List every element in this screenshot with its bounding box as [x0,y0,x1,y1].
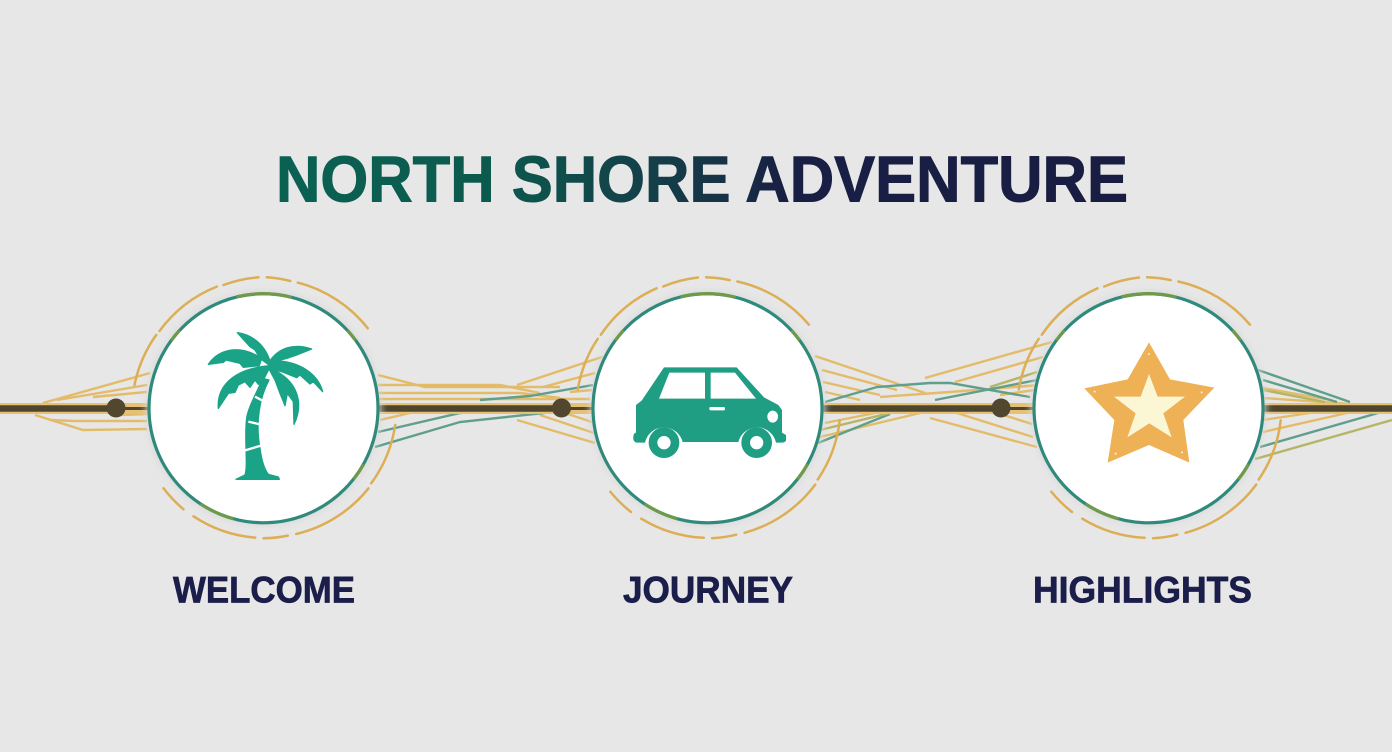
icon: car [633,367,786,454]
panel: journey [574,273,844,610]
label: highlights: HIGHLIGHTS [1033,570,1252,610]
welcome dashed ring [134,277,395,538]
icon: star [1084,342,1214,463]
panel: highlights [1015,273,1285,610]
teal route strands [375,370,1378,447]
label: journey: JOURNEY [623,570,793,610]
main gold band [0,403,1392,414]
welcome disc [146,291,380,525]
highlights disc [1032,291,1266,525]
title: NORTH SHORE ADVENTURE [276,142,1128,216]
stop marker 2 [552,398,571,418]
stop marker 1 [106,398,126,418]
gold route strands [35,342,1350,447]
main dark line [0,405,1392,412]
olive route strands [820,372,1392,459]
journey dashed ring [574,273,844,543]
journey disc [590,291,824,525]
panel: welcome [134,277,395,610]
icon: palm tree [208,333,323,479]
route lines connecting the stops [0,342,1392,459]
stop marker 3 [992,398,1010,418]
highlights dashed ring [1015,273,1285,543]
label: welcome: WELCOME [173,570,355,610]
